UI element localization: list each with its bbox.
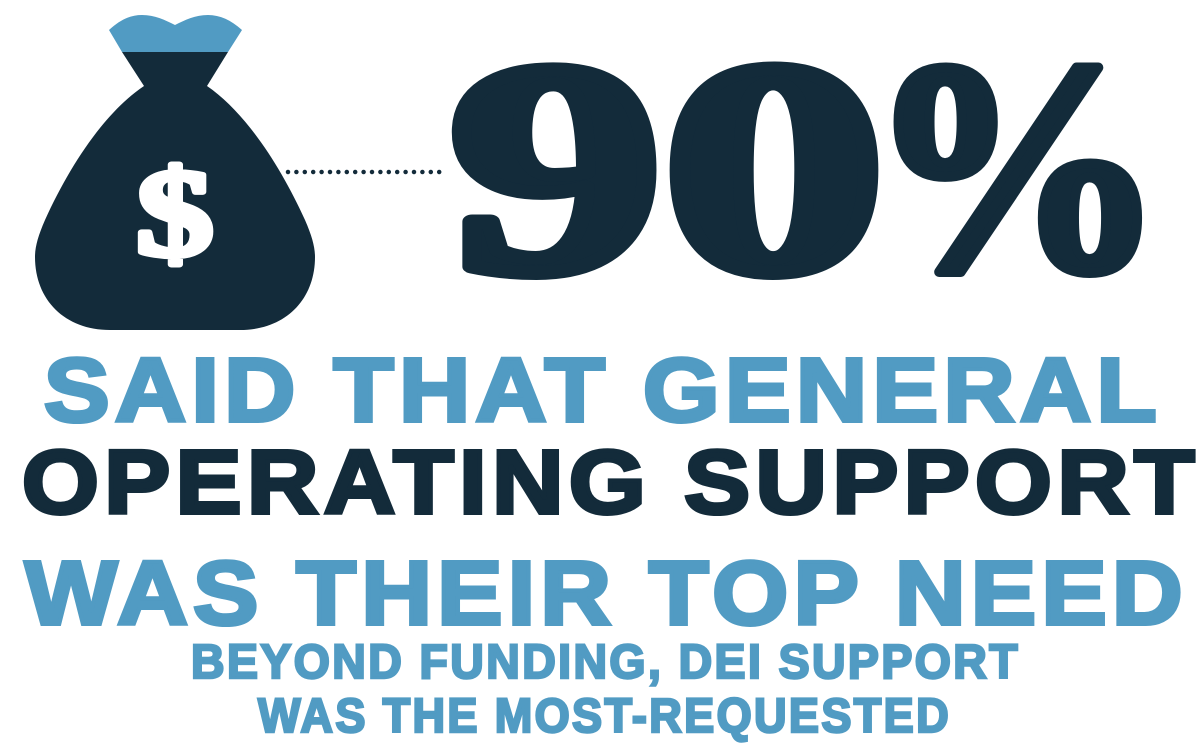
percent sign: %: [868, 0, 1165, 335]
line 1: SAID THAT GENERAL: [44, 341, 1162, 441]
big statistic: [450, 0, 1165, 336]
digit 0: 0: [663, 0, 885, 336]
icon: money bag: [35, 15, 315, 330]
line 2: WAS THE MOST-REQUESTED: [258, 690, 951, 743]
line 1: BEYOND FUNDING, DEI SUPPORT: [191, 636, 1020, 689]
dotted connector: [288, 170, 447, 174]
headline: [22, 341, 1200, 644]
line 2: OPERATING SUPPORT: [22, 433, 1200, 533]
line 3: WAS THEIR TOP NEED: [25, 544, 1188, 644]
bag body: [35, 52, 315, 330]
subheading: [191, 636, 1020, 743]
bag top: [109, 15, 242, 52]
dollar sign: $: [136, 145, 214, 283]
digit 9: 9: [450, 0, 662, 336]
